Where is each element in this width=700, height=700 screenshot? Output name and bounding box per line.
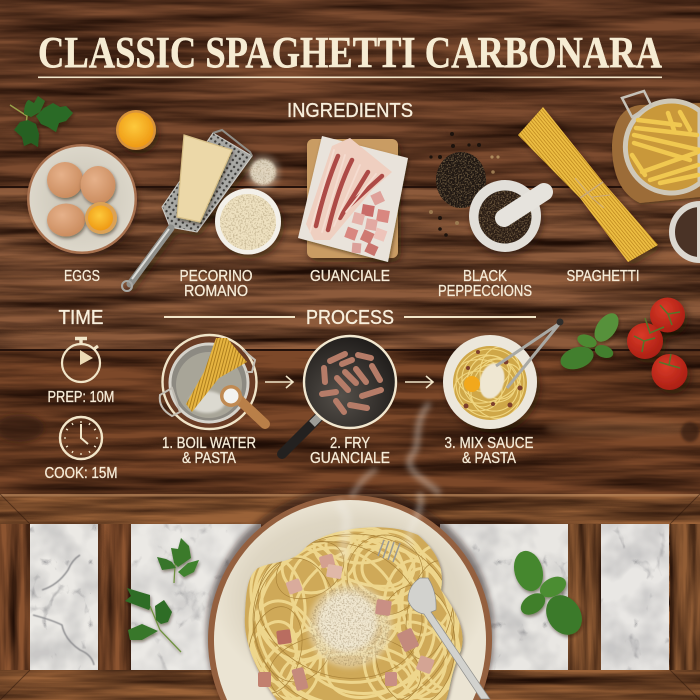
text: cook time: COOK: 15M (44, 465, 118, 482)
step labels: & PASTA (462, 450, 517, 467)
marble tile 3 (440, 524, 568, 670)
icon: basil leaves (558, 309, 623, 373)
marble tile 1 (30, 524, 98, 670)
spaghetti carbonara mound (245, 527, 463, 700)
icon: mortar and pestle (469, 180, 544, 257)
icon: glass jar of pasta (612, 91, 700, 260)
step labels (162, 435, 534, 467)
ingredient labels: ROMANO (184, 283, 248, 300)
heading: process: PROCESS (306, 307, 394, 329)
steam (340, 405, 438, 555)
icon: parsley sprig (10, 96, 73, 147)
marble tile 2 (131, 524, 261, 670)
step labels: & PASTA (182, 450, 237, 467)
carbonara bowl (206, 487, 494, 700)
fork (378, 540, 490, 699)
ingredient labels: BLACK (463, 268, 508, 285)
icon: bowl of pecorino (215, 188, 281, 254)
icon: black peppercorns (429, 132, 500, 237)
heading: ingredients: INGREDIENTS (287, 100, 413, 122)
step labels: 1. BOIL WATER (162, 435, 256, 452)
text: prep time: PREP: 10M (48, 389, 114, 406)
icon: parsley on marble (125, 538, 199, 652)
ingredient labels: PECORINO (180, 268, 252, 285)
ingredient labels: SPAGHETTI (566, 268, 640, 285)
step 2: fry guanciale (282, 336, 396, 454)
icon: stopwatch (62, 338, 100, 382)
ingredient labels: EGGS (64, 268, 100, 285)
icon: cheese wedge (177, 135, 232, 222)
wood table background (0, 0, 700, 495)
step labels: 3. MIX SAUCE (444, 435, 534, 452)
step labels: GUANCIALE (310, 450, 390, 467)
arrow: step 2 to step 3 (405, 376, 433, 388)
ingredient labels (64, 268, 640, 300)
heading: time: TIME (58, 307, 104, 329)
guanciale pieces (258, 553, 435, 691)
icon: grated cheese pile (246, 155, 280, 189)
icon: spaghetti bundle (518, 107, 658, 262)
icon: cheese grater (122, 130, 252, 291)
step labels: 2. FRY (330, 435, 370, 452)
grated parmesan (308, 584, 392, 668)
arrow: step 1 to step 2 (265, 376, 293, 388)
ingredient labels: GUANCIALE (310, 268, 390, 285)
icon: egg plate (27, 144, 139, 257)
icon: egg yolk shell (116, 110, 156, 150)
wooden frame with marble tiles (0, 494, 700, 700)
icon: tomatoes (627, 298, 688, 390)
ingredient labels: PEPPECCIONS (438, 283, 532, 300)
step 3: mix sauce and pasta (443, 318, 564, 429)
icon: guanciale on board (298, 136, 408, 262)
icon: clock (60, 417, 102, 459)
marble tile 4 (601, 524, 669, 670)
icon: basil on marble (510, 548, 589, 642)
step 1: boil water and pasta (160, 335, 265, 429)
